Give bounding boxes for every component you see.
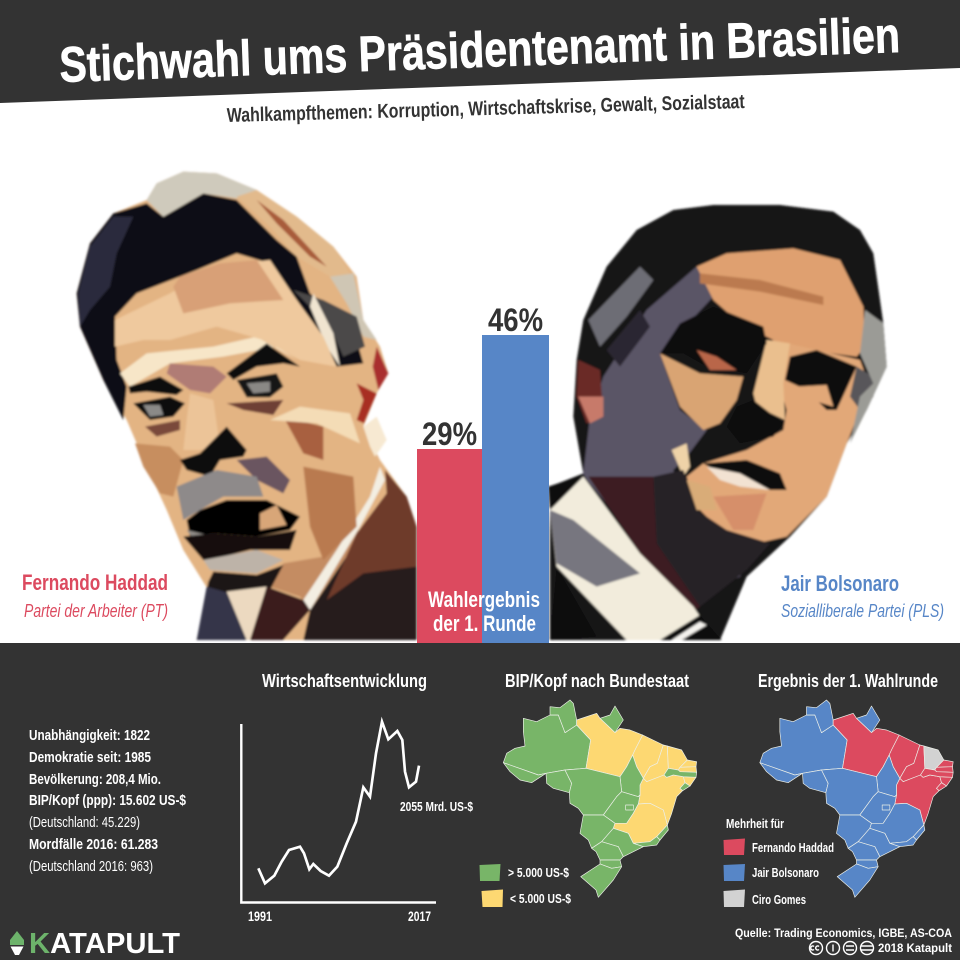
key facts: Mordfälle 2016: 61.283 <box>29 837 158 853</box>
logo: Katapult <box>10 928 180 960</box>
key facts: Unabhängigkeit: 1822 <box>29 728 150 744</box>
bar chart: Wahlergebnis <box>417 302 549 644</box>
bar caption <box>428 587 540 636</box>
legend: Mehrheit für: Fernando Haddad <box>752 840 834 855</box>
heading: BIP/Kopf: BIP/Kopf nach Bundestaat <box>505 671 689 691</box>
value: 29%: 29% <box>422 416 477 452</box>
header band <box>0 0 960 103</box>
legend: Mehrheit für: Mehrheit für <box>726 816 784 831</box>
map: BIP/Kopf nach Bundesstaat <box>503 700 697 897</box>
axis label: 2017: 2017 <box>408 909 431 924</box>
legend: BIP/Kopf: > 5.000 US-$ <box>508 865 570 880</box>
portrait: Fernando Haddad <box>77 172 417 640</box>
bar: Bolsonaro 46% <box>482 335 549 644</box>
legend: Mehrheit für: Jair Bolsonaro <box>752 865 819 880</box>
key facts: (Deutschland: 45.229) <box>29 815 140 831</box>
bar: Haddad 29% <box>417 449 482 644</box>
line chart: Wirtschaftsentwicklung <box>241 722 474 924</box>
icon: Katapult arrow <box>10 931 24 955</box>
key facts <box>29 728 186 875</box>
bottom panel <box>0 643 960 960</box>
heading: Wirtschaftsentwicklung: Wirtschaftsentwicklung <box>262 671 427 691</box>
portrait: Jair Bolsonaro <box>548 205 887 640</box>
copyright: 2018 Katapult <box>878 943 952 955</box>
legend: Mehrheit für: Ciro Gomes <box>752 892 806 907</box>
key facts: Bevölkerung: 208,4 Mio. <box>29 772 161 788</box>
axis label: 1991: 1991 <box>248 909 272 924</box>
GDP line <box>258 722 419 883</box>
key facts: Demokratie seit: 1985 <box>29 750 151 766</box>
legend: BIP/Kopf <box>480 864 572 907</box>
value: 46%: 46% <box>488 302 543 338</box>
label: Fernando Haddad: Partei der Arbeiter (PT) <box>24 601 168 621</box>
wordmark: KATAPULT <box>29 928 180 960</box>
label: Jair Bolsonaro: Jair Bolsonaro <box>781 571 899 596</box>
icons: Creative Commons <box>810 942 874 954</box>
legend: BIP/Kopf: < 5.000 US-$ <box>510 891 572 906</box>
key facts: BIP/Kopf (ppp): 15.602 US-$ <box>29 793 186 809</box>
legend: Mehrheit für <box>724 816 834 907</box>
bar caption: Wahlergebnis <box>428 587 540 612</box>
subtitle: Wahlkampfthemen: Korruption, Wirtschaftskrise, Gewalt, Sozialstaat <box>227 91 745 127</box>
label: Fernando Haddad <box>22 570 168 621</box>
bar caption: der 1. Runde <box>433 611 536 636</box>
value label: 2055 Mrd. US-$ <box>400 799 474 814</box>
map: Ergebnis der 1. Wahlrunde <box>760 700 953 897</box>
key facts: (Deutschland 2016: 963) <box>29 859 153 875</box>
label: Fernando Haddad: Fernando Haddad <box>22 570 168 595</box>
label: Jair Bolsonaro <box>781 571 944 621</box>
axes <box>241 724 436 902</box>
